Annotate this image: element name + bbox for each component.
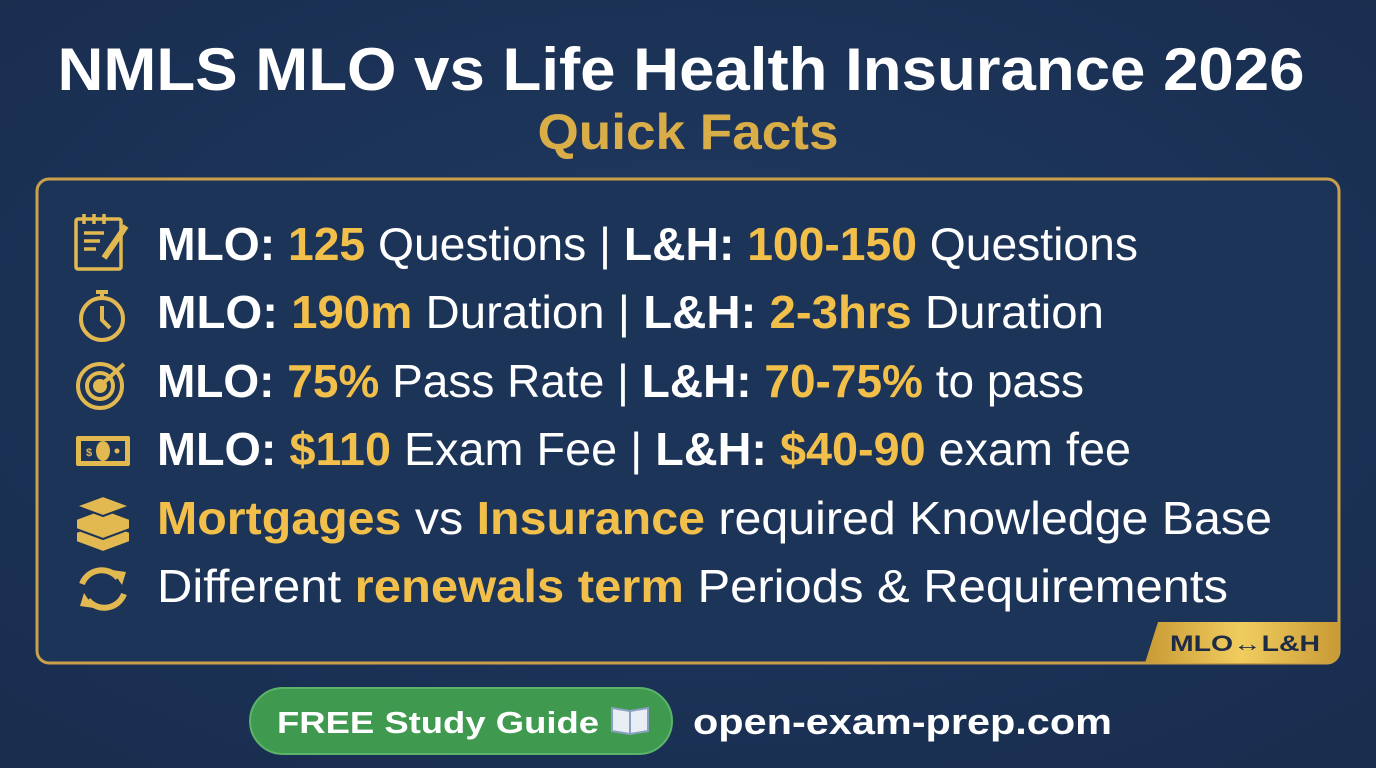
button: free study guide: FREE Study Guide [277,705,599,740]
row: renewals: Different renewals term Periods & Requirements [157,560,1228,612]
icon: books [76,496,130,552]
row: fee: MLO: $110 Exam Fee | L&H: $40-90 exam fee [157,423,1131,475]
row: questions: MLO: 125 Questions | L&H: 100-150 Questions [157,218,1138,270]
row: knowledge: Mortgages vs Insurance required Knowledge Base [157,492,1272,544]
icon: notepad [76,214,126,269]
row: duration: MLO: 190m Duration | L&H: 2-3hrs Duration [157,286,1104,338]
subtitle: Quick Facts [538,104,838,160]
icon: cash [76,436,130,466]
tag: MLO vs L&H: MLO↔L&H [1170,631,1320,656]
icon: cash: $ [86,447,92,459]
icon: book [612,708,648,734]
url: open-exam-prep.com [693,701,1112,742]
icon: stopwatch [81,292,123,340]
title: NMLS MLO vs Life Health Insurance 2026 [58,36,1304,103]
panel: quick facts [37,179,1339,663]
button: free study guide [250,688,672,754]
icon: target [78,364,124,408]
tag: MLO vs L&H [1145,622,1339,663]
icon: renew [80,570,126,608]
row: pass rate: MLO: 75% Pass Rate | L&H: 70-75% to pass [157,355,1084,407]
